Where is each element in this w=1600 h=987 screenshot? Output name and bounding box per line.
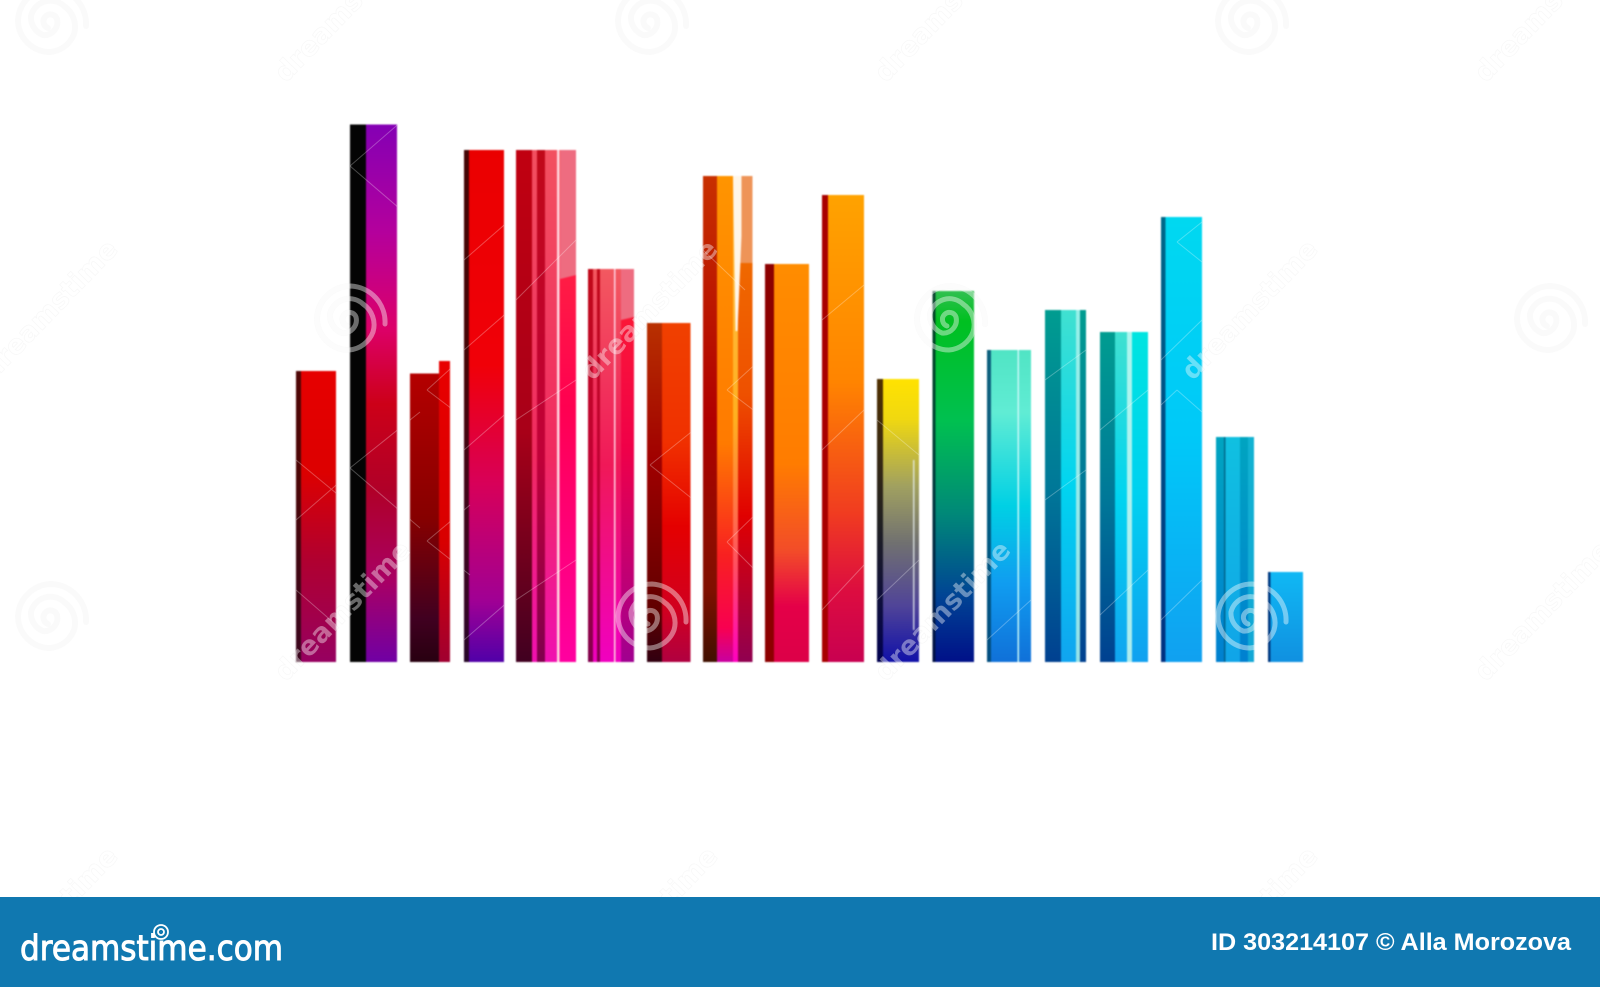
bar 2: black and purple to red [350,124,397,662]
icon: logo spiral [154,925,168,939]
footer banner [0,897,1600,987]
bar 10: amber to crimson [822,195,864,662]
bar 4: red to violet [464,150,504,662]
watermark lines over bars [296,114,1202,640]
bar 6: glossy red to magenta [588,269,634,662]
watermark: spirals and dreamstime text: dreamstime [1176,234,1324,386]
bar 13: aqua to blue [987,350,1031,662]
bar 8: glossy orange with white highlight [703,176,752,662]
bar 9: orange to crimson [765,264,809,662]
bar 7: orange-red with dark side [647,323,690,662]
bar 11: yellow to navy [877,379,919,662]
bar 1: red to magenta [296,371,336,662]
watermark: spirals and dreamstime text: dreamstime [576,234,724,386]
bar 3: dark red with stepped top [410,361,450,662]
bar 12: green to navy [932,291,974,662]
bar 5: glossy red to pink [516,150,576,662]
bar 17: cyan cylinder [1216,437,1254,662]
bar 15: teal to cyan with highlight [1100,332,1148,662]
watermark: spirals and dreamstime text: dreamstime [269,535,417,687]
watermark: spirals and dreamstime text: dreamstime [869,535,1017,687]
bar 18: short blue [1268,572,1303,662]
bar 14: teal to cyan [1045,310,1086,662]
logo text: dreamstime.com [20,929,283,969]
bar chart [296,124,1303,662]
bar 16: bright cyan [1161,217,1202,662]
image id and author credit: ID 303214107 © Alla Morozova [1211,929,1572,956]
